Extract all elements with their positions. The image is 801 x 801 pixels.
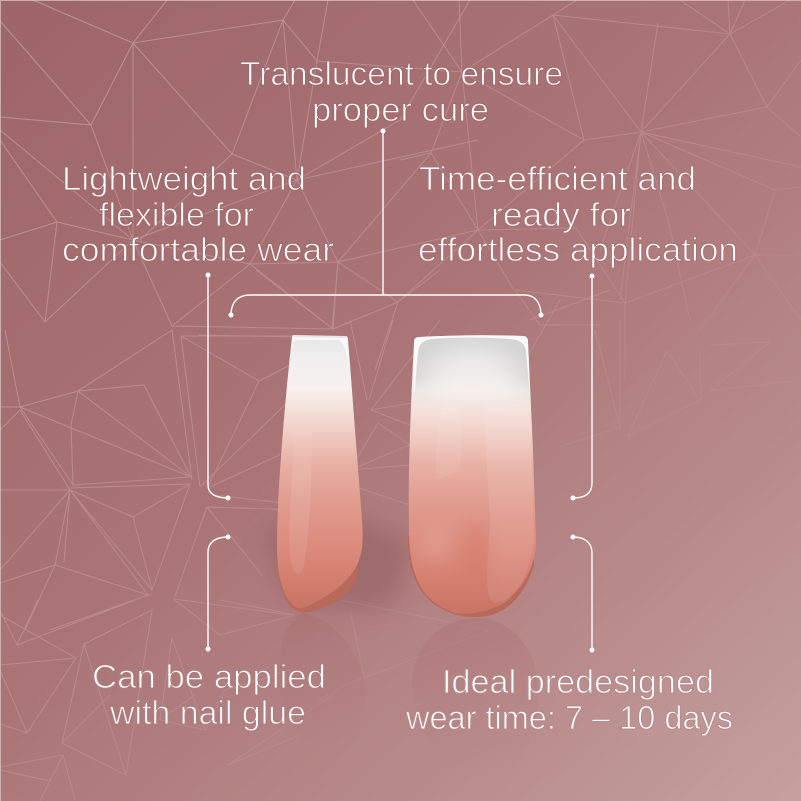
- text: wear time: wear time: 7 – 10 days: [405, 699, 733, 736]
- text: wear time: [405, 663, 733, 736]
- right nail light spot: [422, 527, 450, 563]
- right nail highlight left streak: [436, 370, 462, 480]
- connector: upper left: [206, 273, 230, 500]
- connector: upper right: [571, 274, 594, 500]
- text: time-efficient: Time-efficient and: [419, 160, 696, 197]
- left nail edge: [277, 550, 358, 613]
- text: translucent: [240, 55, 563, 128]
- connector: lower right: [571, 535, 594, 652]
- text: translucent: proper cure: [312, 91, 489, 128]
- text: time-efficient: ready for: [491, 196, 631, 233]
- text: nail glue: with nail glue: [109, 694, 306, 731]
- left nail: [277, 335, 363, 613]
- text: lightweight: [62, 160, 334, 268]
- right nail body: [409, 335, 536, 614]
- text: nail glue: Can be applied: [92, 658, 326, 695]
- left nail top rim: [289, 337, 349, 368]
- connector: lower left: [206, 535, 230, 651]
- text: time-efficient: [418, 160, 738, 268]
- text: time-efficient: effortless application: [418, 231, 738, 268]
- text: lightweight: Lightweight and: [62, 160, 306, 197]
- text: nail glue: [92, 658, 326, 731]
- text: lightweight: flexible for: [99, 196, 254, 233]
- connector: top bracket: [229, 129, 543, 317]
- text: lightweight: comfortable wear: [62, 231, 334, 268]
- right nail edge: [408, 535, 534, 617]
- left nail body: [277, 335, 363, 608]
- right nail top shading: [412, 338, 530, 400]
- text: wear time: Ideal predesigned: [442, 663, 714, 700]
- nail reflections: [279, 613, 538, 780]
- left nail highlight: [289, 420, 312, 575]
- right nail rim: [414, 335, 530, 400]
- nail shadow: [262, 520, 412, 610]
- right nail highlight right streak: [482, 350, 534, 603]
- right nail: [408, 335, 536, 617]
- right nail warm glow: [464, 520, 488, 584]
- text: translucent: Translucent to ensure: [240, 55, 563, 92]
